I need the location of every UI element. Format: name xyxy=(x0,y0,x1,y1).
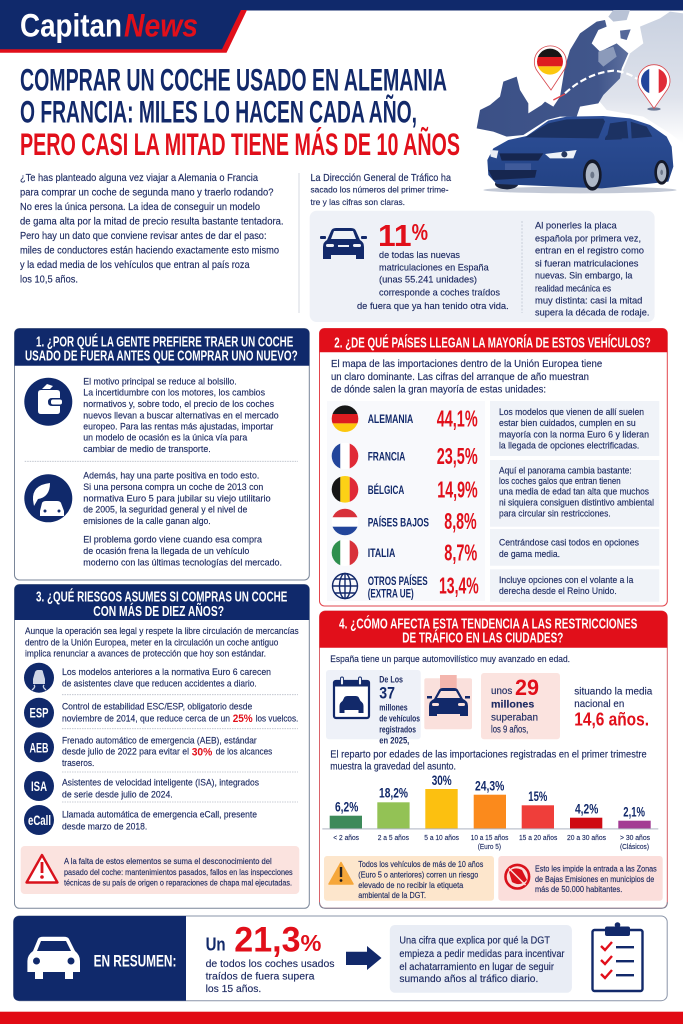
text: summary statement: traídos de fuera supera xyxy=(206,972,315,982)
note: Francia: para circular sin restricciones. xyxy=(499,508,611,519)
row: Otros países: 13,4% xyxy=(439,572,479,598)
note: Alemania: Los modelos que vienen de allí suelen xyxy=(499,406,644,417)
stat: 37 million: de vehículos xyxy=(379,713,420,723)
callout: low emission zones: más de 50.000 habitantes. xyxy=(535,884,622,894)
risk: ISA: Asistentes de velocidad inteligente (ISA), integrados xyxy=(62,777,259,788)
row: Bélgica: 14,9% xyxy=(437,476,478,502)
side note: supera la década de rodaje. xyxy=(535,307,649,318)
row: Países Bajos: 8,8% xyxy=(444,508,477,534)
side note: muy distinta: casi la mitad xyxy=(535,295,642,306)
side note: si fueran matriculaciones xyxy=(535,257,639,268)
note: Italia: Centrándose casi todos en opciones xyxy=(499,537,639,548)
label: en resumen: EN RESUMEN: xyxy=(94,953,176,971)
text: age split intro: El reparto por edades de las importaciones registradas en el primer trimestre xyxy=(330,750,647,761)
note: Francia xyxy=(490,460,659,527)
text: positive side: emisiones de la calle ganan algo. xyxy=(83,515,211,526)
icon: warning triangle xyxy=(26,855,58,882)
callout: orange warning: Todos los vehículos de más de 10 años xyxy=(358,859,483,869)
icon: calendar with car xyxy=(333,677,370,718)
icon: AEB: AEB xyxy=(30,739,48,755)
callout: orange warning: ambiental de la DGT. xyxy=(358,890,426,900)
callout: low emission zones: de Bajas Emisiones en municipios de xyxy=(535,874,654,884)
note: Francia: Aquí el panorama cambia bastante: xyxy=(499,464,632,475)
stat: national average 14,6: nacional en xyxy=(574,698,624,710)
arrow xyxy=(346,946,382,970)
callout: low emission zones: Esto les impide la entrada a las Zonas xyxy=(535,864,657,874)
icon: eCall xyxy=(24,805,54,835)
side note: entran en el registro como xyxy=(535,245,644,256)
risk: ISA xyxy=(62,777,259,799)
bar chart: imports by age xyxy=(322,773,658,851)
intro text: DGT: sacado los números del primer trime- xyxy=(310,184,449,194)
stat description: (unas 55.241 unidades) xyxy=(379,274,477,285)
text: main reason: un modelo de ocasión es la única vía para xyxy=(83,432,248,443)
title xyxy=(20,62,460,162)
note: Francia: ni siquiera consiguen distintivo ambiental xyxy=(499,497,654,508)
row: Italia: ITALIA xyxy=(368,548,395,560)
bar chart: imports by age: 15 a 20 años xyxy=(519,833,557,842)
stat: 29 million: 29 xyxy=(515,675,539,700)
title: O FRANCIA: MILES LO HACEN CADA AÑO, xyxy=(20,94,417,130)
text: the big problem xyxy=(83,533,282,568)
bar chart: imports by age: 15% xyxy=(528,789,547,804)
note: otros: Incluye opciones con el volante a la xyxy=(499,574,634,585)
bar chart: imports by age: 10 a 15 años xyxy=(471,833,509,842)
intro text block: No eres la única persona. La idea de conseguir un modelo xyxy=(20,202,260,213)
bar chart: imports by age: 20 a 30 años xyxy=(567,833,606,842)
intro text: DGT: tre y las cifras son claras. xyxy=(310,197,405,207)
callout: warning xyxy=(21,846,299,894)
intro text block xyxy=(20,173,284,286)
icon: France pin xyxy=(638,65,670,111)
text: the big problem: moderno con las últimas tecnologías del mercado. xyxy=(83,557,282,568)
note: Italia xyxy=(490,529,659,566)
panel 2: countries xyxy=(320,328,667,606)
note: Alemania xyxy=(490,401,659,456)
big number: 21,3%: % xyxy=(300,930,321,956)
text: summary statement xyxy=(206,959,334,995)
bar chart: imports by age: 30% xyxy=(432,773,452,788)
bar chart: imports by age: (Euro 5) xyxy=(478,842,501,851)
text: main reason: nuevos llevan a buscar alternativas en el mercado xyxy=(83,409,279,420)
heading 2 xyxy=(320,328,667,352)
panel 4: city restrictions xyxy=(320,611,667,908)
risk: eCall: Llamada automática de emergencia eCall, presente xyxy=(62,809,257,820)
stat description: de todas las nuevas xyxy=(379,249,460,260)
risk: AEB: desde julio de 2022 para evitar el xyxy=(62,746,189,757)
bar chart: imports by age: 6,2% xyxy=(335,800,358,815)
bar chart: imports by age: 4,2% xyxy=(575,802,598,817)
row: Alemania: 44,1% xyxy=(437,406,478,432)
bar chart: imports by age: 5 a 10 años xyxy=(424,833,459,842)
side note: Al ponerles la placa xyxy=(535,220,617,231)
risk: eCall: desde marzo de 2018. xyxy=(62,820,147,831)
text box: DGT conclusion: sumando años al tráfico diario. xyxy=(399,974,538,985)
text: main reason: La incertidumbre con los motores, los cambios xyxy=(83,387,265,398)
bar chart: imports by age: > 30 años xyxy=(620,833,650,842)
note: Italia: de gama media. xyxy=(499,548,560,559)
stat description xyxy=(357,249,509,311)
bar chart: imports by age: 2 a 5 años xyxy=(378,833,409,842)
icon: skidding car xyxy=(24,663,54,693)
callout: low emission zones xyxy=(498,856,663,901)
stat: 37 million: registrados xyxy=(379,724,416,734)
text: summary statement: de todos los coches usados xyxy=(206,959,334,970)
footer band xyxy=(0,1012,683,1024)
row: Otros países: OTROS PAÍSES xyxy=(368,575,428,588)
note: otros xyxy=(490,569,659,602)
row: Alemania xyxy=(331,405,478,433)
heading 3 xyxy=(14,584,309,620)
risk: Euro 6: Los modelos anteriores a la normativa Euro 6 carecen xyxy=(62,666,271,677)
stat description: matriculaciones en España xyxy=(379,261,489,272)
big number: 11%: % xyxy=(412,219,428,245)
row: Alemania: ALEMANIA xyxy=(368,414,413,426)
row: Francia: 23,5% xyxy=(437,443,478,469)
note: Francia: una media de edad tan alta que muchos xyxy=(499,486,649,497)
stat: 37 million: 37 xyxy=(379,683,395,702)
side note: nuevas. Sin embargo, la xyxy=(535,270,633,281)
stat: national average 14,6: situando la media xyxy=(574,686,652,698)
icon: eCall: eCall xyxy=(28,812,51,828)
text: positive side: de 2005, la seguridad general y el nivel de xyxy=(83,504,247,515)
heading 4 xyxy=(320,611,667,648)
risk: ESP: noviembre de 2014, que reduce cerca de un xyxy=(62,712,230,723)
stat: national average 14,6: 14,6 años. xyxy=(574,710,649,730)
stat: 29 million: millones xyxy=(491,698,534,710)
icon: navy car front xyxy=(320,228,367,259)
big number: 21,3% xyxy=(206,921,321,960)
illustration: map of Europe with pins and car xyxy=(477,10,683,193)
icon: ESP: ESP xyxy=(30,705,48,721)
icon: clipboard checklist xyxy=(592,922,642,991)
big number: 21,3%: 21,3 xyxy=(234,921,300,960)
icon: Germany pin xyxy=(534,46,566,90)
text: summary statement: los 15 años. xyxy=(206,984,261,995)
bar chart: imports by age: (Clásicos) xyxy=(620,842,649,851)
stat description: corresponde a coches traídos xyxy=(379,287,500,298)
icon: orange triangle xyxy=(329,862,353,884)
row: Italia xyxy=(331,539,477,567)
text: countries intro: El mapa de las importaciones dentro de la Unión Europea tiene xyxy=(331,359,603,370)
intro text block: miles de conductores están haciendo exactamente esto mismo xyxy=(20,246,279,256)
text: main reason: europeo. Para las rentas más ajustadas, importar xyxy=(83,420,273,431)
icon: white car xyxy=(27,937,80,979)
text: risks intro xyxy=(25,625,299,658)
risk: ESP xyxy=(62,701,298,725)
text box: DGT conclusion: Una cifra que explica por qué la DGT xyxy=(399,936,550,946)
header band with logo: News xyxy=(124,8,198,44)
row: Países Bajos xyxy=(331,508,477,536)
callout: orange warning xyxy=(324,856,494,901)
row: Italia: 8,7% xyxy=(444,540,477,566)
note: Francia: los coches galos que entran tienen xyxy=(499,475,621,486)
risk: AEB: de los alcances xyxy=(216,746,273,757)
text: the big problem: El problema gordo viene cuando esa compra xyxy=(83,533,263,544)
icon: prohibition sign xyxy=(506,865,529,888)
risk: Euro 6: de asistentes clave que reducen accidentes a diario. xyxy=(62,678,257,689)
text: main reason: cambiar de medio de transporte. xyxy=(83,443,211,454)
heading 1: USADO DE FUERA ANTES QUE COMPRAR UNO NUEVO? xyxy=(25,348,298,365)
text box: DGT conclusion: empieza a pedir medidas para incentivar xyxy=(399,949,565,960)
callout: warning: A la falta de estos elementos se suma el desconocimiento del xyxy=(64,856,272,866)
intro text block: para comprar un coche de segunda mano y traerlo rodando? xyxy=(20,188,274,198)
heading 1: 1. ¿POR QUÉ LA GENTE PREFIERE TRAER UN COCHE xyxy=(36,334,293,350)
stat: 37 million xyxy=(326,670,421,746)
icon: ISA: ISA xyxy=(31,778,47,794)
big number: 11% xyxy=(378,218,428,253)
text box: DGT conclusion: el achatarramiento en lugar de seguir xyxy=(399,962,555,973)
callout: warning: pasado del coche: mantenimientos pasados, fallos en las inspecciones xyxy=(64,867,293,877)
text: age split intro: muestra la gravedad del asunto. xyxy=(330,761,456,772)
text: main reason xyxy=(83,375,279,454)
risk: AEB: traseros. xyxy=(62,757,94,768)
stat: 29 million: superaban xyxy=(491,712,538,723)
intro text: DGT: La Dirección General de Tráfico ha xyxy=(310,173,451,184)
panel 3: risks xyxy=(14,584,309,908)
text: positive side xyxy=(83,470,271,526)
heading 1 xyxy=(14,328,309,366)
risk: eCall xyxy=(62,809,257,831)
icon: AEB xyxy=(24,732,54,762)
risk: Euro 6 xyxy=(62,666,271,689)
callout: orange warning: (Euro 5 o anteriores) corren un riesgo xyxy=(358,870,478,880)
text box: DGT conclusion xyxy=(390,925,572,993)
intro text block: ¿Te has planteado alguna vez viajar a Alemania o Francia xyxy=(20,173,258,184)
intro text: DGT xyxy=(310,173,451,207)
text: positive side: Además, hay una parte positiva en todo esto. xyxy=(83,470,259,481)
callout: warning: técnicas de su país de origen o reparaciones de chapa mal ejecutadas. xyxy=(64,878,292,888)
text: countries intro: un claro dominante. Las cifras del arranque de año muestran xyxy=(331,372,589,383)
row: Otros países xyxy=(332,572,479,600)
stat description: de fuera que ya han tenido otra vida. xyxy=(357,300,509,311)
panel: 11% stat xyxy=(310,211,655,322)
intro text block: de gama alta por la mitad de precio resulta bastante tentadora. xyxy=(20,216,284,228)
panel 1: why import xyxy=(14,328,309,580)
stat: 37 million: De Los xyxy=(379,674,403,686)
risk: AEB xyxy=(62,734,273,768)
text: main reason: normativos y, sobre todo, el precio de los coches xyxy=(83,398,274,409)
side note: española por primera vez, xyxy=(535,232,641,243)
risk: ESP: Control de estabilidad ESC/ESP, obligatorio desde xyxy=(62,701,252,712)
row: Bélgica xyxy=(331,475,478,503)
text: main reason: El motivo principal se reduce al bolsillo. xyxy=(83,375,237,386)
note: Alemania: la llegada de opciones electrificadas. xyxy=(499,439,639,450)
icon: ESP xyxy=(24,698,54,728)
risk: AEB: 30% xyxy=(192,746,212,758)
stat: 37 million: millones xyxy=(379,702,408,712)
stat: 29 million xyxy=(481,673,560,739)
text: risks intro: dentro de la Unión Europea, meter en la circulación un coche antiguo xyxy=(25,636,278,647)
big number: 21,3%: Un xyxy=(206,935,226,955)
bar chart: imports by age: 18,2% xyxy=(379,786,408,801)
stat: 29 million: los 9 años, xyxy=(491,724,528,735)
row: Francia: FRANCIA xyxy=(368,452,405,464)
text: countries intro: de dónde salen la gran mayoría de estas unidades: xyxy=(331,385,546,396)
side note xyxy=(535,220,649,318)
intro text block: Pero hay un dato que conviene revisar antes de dar el paso: xyxy=(20,231,266,242)
stat: 29 million: unos xyxy=(491,686,512,697)
row: Bélgica: BÉLGICA xyxy=(368,484,404,497)
note: Alemania: estar bien cuidados, cumplen en su xyxy=(499,417,636,428)
risk: ISA: de serie desde julio de 2024. xyxy=(62,788,173,799)
heading 3: 3. ¿QUÉ RIESGOS ASUMES SI COMPRAS UN COCHE xyxy=(36,589,287,606)
heading 3: CON MÁS DE DIEZ AÑOS? xyxy=(93,602,224,620)
text: countries intro xyxy=(331,359,603,396)
big number: 11%: 11 xyxy=(378,218,412,253)
row: Países Bajos: PAÍSES BAJOS xyxy=(368,516,429,530)
heading 4: DE TRÁFICO EN LAS CIUDADES? xyxy=(402,630,563,647)
intro text block: y la edad media de los vehículos que entran al país roza xyxy=(20,260,250,271)
row: Otros países: (EXTRA UE) xyxy=(368,588,414,600)
side note: realidad mecánica es xyxy=(535,282,611,293)
text: positive side: Si una persona compra un coche de 2013 con xyxy=(83,481,263,492)
panel: summary xyxy=(14,916,667,1001)
icon: ISA xyxy=(24,771,54,801)
note: Alemania: mayoría con la norma Euro 6 y lideran xyxy=(499,428,649,439)
text: risks intro: Aunque la operación sea legal y respete la libre circulación de mercancías xyxy=(25,625,299,636)
stat: 37 million: en 2025, xyxy=(379,736,409,746)
text: risks intro: implica renunciar a avances de protección que hoy son estándar. xyxy=(25,647,266,658)
icon: car on pink xyxy=(424,675,472,729)
risk: AEB: Frenado automático de emergencia (AEB), estándar xyxy=(62,734,257,745)
stat: national average 14,6 xyxy=(574,686,652,730)
icon: leaf and car xyxy=(24,474,72,522)
bar chart: imports by age: 2,1% xyxy=(623,805,645,820)
header band with logo: Capitan xyxy=(20,8,122,44)
callout: orange warning: elevado de no recibir la etiqueta xyxy=(358,880,463,890)
header band with logo xyxy=(0,0,683,53)
text: fleet intro: España tiene un parque automovilístico muy avanzado en edad. xyxy=(330,653,570,664)
intro text block: los 10,5 años. xyxy=(20,274,78,286)
icon: blue car xyxy=(483,116,677,193)
icon: wallet xyxy=(24,378,72,426)
text: the big problem: de ocasión frena la llegada de un vehículo xyxy=(83,545,249,556)
risk: ESP: los vuelcos. xyxy=(256,712,298,723)
bar chart: imports by age: 24,3% xyxy=(475,778,504,793)
risk: ESP: 25% xyxy=(233,713,253,725)
bar chart: imports by age: < 2 años xyxy=(333,833,359,842)
note: otros: derecha desde el Reino Unido. xyxy=(499,585,617,596)
row: Francia xyxy=(332,444,478,468)
text: positive side: normativa Euro 5 para jubilar su viejo utilitario xyxy=(83,493,271,504)
text: age split intro xyxy=(330,750,647,772)
